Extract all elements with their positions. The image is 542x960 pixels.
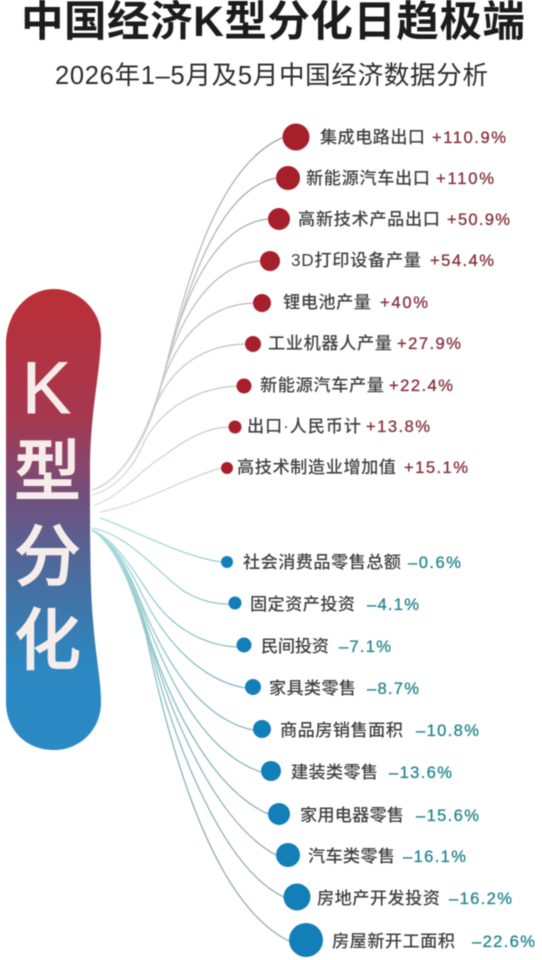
upper connector lines — [92, 137, 284, 512]
lower connector lines — [92, 518, 289, 941]
item: 3D打印设备产量: 3D打印设备产量 — [291, 250, 421, 270]
item: 工业机器人产量: 工业机器人产量 — [268, 333, 392, 353]
item: 固定资产投资 — [228, 594, 419, 614]
item: 房地产开发投资: 房地产开发投资 — [317, 888, 440, 908]
item: 房屋新开工面积: –22.6% — [472, 932, 535, 951]
item: 新能源汽车出口: 新能源汽车出口 — [306, 168, 430, 188]
item: 集成电路出口: +110.9% — [432, 128, 506, 147]
item: 工业机器人产量: +27.9% — [397, 334, 461, 353]
item: 社会消费品零售总额 — [221, 552, 461, 572]
item: 新能源汽车产量: +22.4% — [389, 376, 453, 395]
item: 汽车类零售: –16.1% — [403, 847, 466, 866]
item: 社会消费品零售总额: 社会消费品零售总额 — [243, 552, 401, 572]
item: 固定资产投资: –4.1% — [367, 595, 419, 614]
item: 商品房销售面积 — [253, 720, 479, 740]
panel: K型分化 pill: 分 — [14, 503, 81, 600]
panel: K型分化 pill — [6, 289, 101, 750]
item: 房地产开发投资: –16.2% — [449, 889, 512, 908]
item: 高技术制造业增加值: 高技术制造业增加值 — [237, 457, 396, 477]
item: 高技术制造业增加值 — [221, 457, 468, 477]
item: 工业机器人产量 — [245, 333, 461, 353]
item: 固定资产投资: 固定资产投资 — [250, 594, 355, 614]
item: 民间投资: 民间投资 — [261, 636, 329, 656]
panel: K型分化 pill: 型 — [14, 418, 81, 515]
item: 民间投资 — [236, 636, 391, 656]
item: 集成电路出口: 集成电路出口 — [320, 127, 425, 147]
item: 出口·人民币计: +13.8% — [366, 417, 430, 436]
item: 锂电池产量: +40% — [380, 293, 428, 312]
item: 房地产开发投资 — [284, 884, 512, 910]
item: 高新技术产品出口: +50.9% — [447, 210, 510, 229]
item: 出口·人民币计: 出口·人民币计 — [247, 416, 361, 436]
item: 新能源汽车出口: +110% — [436, 169, 494, 188]
item: 房屋新开工面积: 房屋新开工面积 — [332, 931, 455, 951]
item: 3D打印设备产量 — [260, 250, 494, 271]
item: 锂电池产量: 锂电池产量 — [283, 292, 371, 312]
item: 社会消费品零售总额: –0.6% — [408, 553, 461, 572]
item: 家用电器零售: –15.6% — [416, 806, 479, 825]
item: 房屋新开工面积 — [289, 923, 535, 957]
item: 家具类零售: 家具类零售 — [269, 678, 356, 698]
item: 建装类零售 — [261, 761, 452, 782]
item: 建装类零售: 建装类零售 — [291, 762, 378, 782]
item: 家具类零售 — [245, 678, 419, 698]
item: 高新技术产品出口: 高新技术产品出口 — [298, 209, 440, 229]
item: 家用电器零售 — [268, 803, 479, 825]
item: 新能源汽车产量: 新能源汽车产量 — [260, 375, 384, 395]
item: 新能源汽车产量 — [236, 375, 453, 395]
item: 新能源汽车出口 — [276, 166, 494, 190]
item: 家具类零售: –8.7% — [367, 679, 419, 698]
item: 汽车类零售 — [276, 843, 466, 867]
item: 商品房销售面积: 商品房销售面积 — [280, 720, 403, 740]
panel: K型分化 pill: 化 — [14, 587, 81, 684]
item: 高新技术产品出口 — [268, 208, 510, 230]
item: 出口·人民币计 — [228, 416, 430, 436]
item: 集成电路出口 — [282, 124, 506, 150]
item: 锂电池产量 — [253, 292, 428, 312]
item: 汽车类零售: 汽车类零售 — [308, 846, 395, 866]
item: 3D打印设备产量: +54.4% — [430, 251, 494, 270]
item: 商品房销售面积: –10.8% — [416, 721, 479, 740]
subtitle: 2026年1–5月及5月中国经济数据分析 — [55, 62, 488, 90]
item: 高技术制造业增加值: +15.1% — [404, 458, 468, 477]
title: 中国经济K型分化日趋极端 — [21, 0, 525, 46]
item: 建装类零售: –13.6% — [389, 763, 452, 782]
item: 家用电器零售: 家用电器零售 — [300, 805, 404, 825]
item: 民间投资: –7.1% — [339, 637, 391, 656]
panel: K型分化 pill: K — [22, 348, 71, 429]
